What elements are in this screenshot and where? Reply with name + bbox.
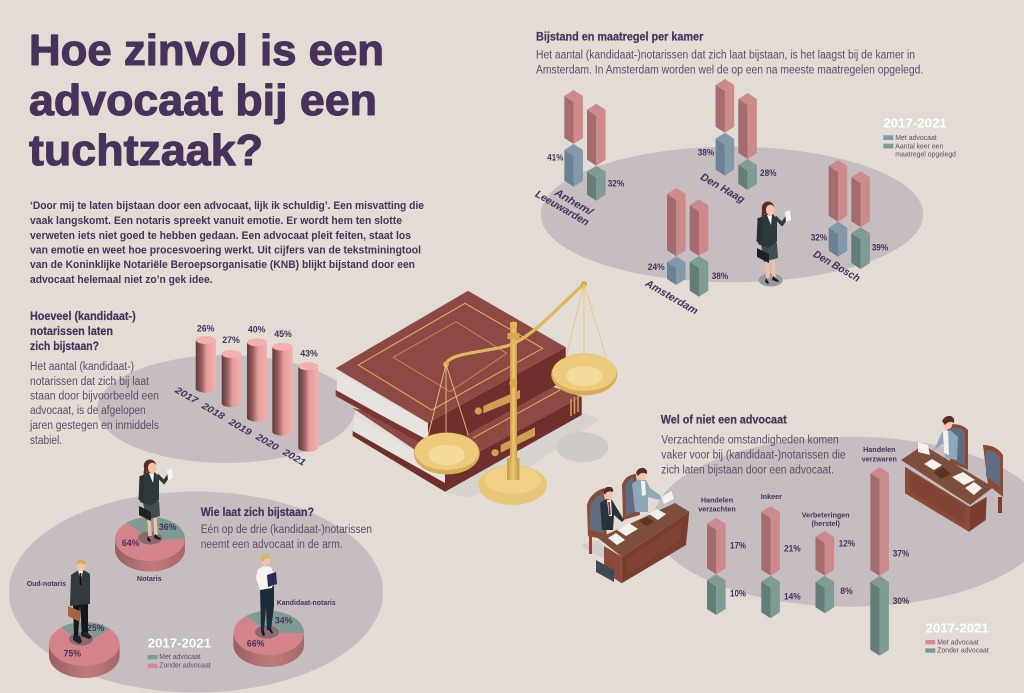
legend: wel of niet xyxy=(925,620,989,655)
text: wel of niet xyxy=(661,434,846,476)
cylinder chart: 2017-2021: 2021 xyxy=(280,446,307,469)
bar chart: Amsterdam: Amsterdam xyxy=(642,277,700,317)
bar chart: verbeteringen: 8% xyxy=(840,586,853,596)
text: wel of niet: vaker voor bij (kandidaat-)notarissen die xyxy=(661,449,846,461)
pie chart: oud-notaris: Oud-notaris xyxy=(27,579,66,588)
bar chart: handelen verzwaren: 37% xyxy=(893,548,909,558)
bar chart: handelen verzwaren: verzwaren xyxy=(862,455,897,464)
pie chart: notaris xyxy=(115,517,185,583)
bar chart: handelen verzwaren: 30% xyxy=(893,596,909,606)
bar chart: Arnhem/Leeuwarden: Anhem/ xyxy=(551,186,596,219)
cylinder chart: 2017-2021: 40% xyxy=(248,325,266,335)
heading: wie laat zich bijstaan: Wie laat zich bijstaan? xyxy=(201,507,314,519)
bar chart: handelen verzachten: verzachten xyxy=(698,505,736,514)
illustration: left desk with two people xyxy=(581,468,689,583)
text: wie laat zich bijstaan: Eén op de drie (kandidaat-)notarissen xyxy=(201,524,372,536)
legend: wel of niet: Met advocaat xyxy=(937,637,980,646)
pie chart: oud-notaris: 25% xyxy=(87,623,105,633)
pie chart: notaris: Notaris xyxy=(137,574,162,583)
panel: wie laat zich bijstaan xyxy=(9,460,383,692)
bar chart: Den Haag: 38% xyxy=(698,148,714,158)
intro text block: van emotie en weet hoe procesvoering werkt. Uit cijfers van de tekstminingtool xyxy=(30,244,421,256)
legend: bijstand per kamer: Met advocaat xyxy=(895,133,938,142)
figure: kandidaat-notaris woman xyxy=(256,554,277,636)
legend: bijstand per kamer: maatregel opgelegd xyxy=(895,150,956,159)
cylinder chart: 2017-2021: 2018 xyxy=(199,400,227,423)
pie chart: notaris: 64% xyxy=(122,538,140,548)
cylinder chart: 2017-2021: 43% xyxy=(300,349,318,359)
bar chart: handelen verzwaren xyxy=(862,445,909,656)
bar chart: Amsterdam xyxy=(642,188,728,317)
panel: wel of niet een advocaat xyxy=(581,414,1024,656)
bar chart: Amsterdam: 38% xyxy=(712,271,728,281)
text: hoeveel notarissen xyxy=(29,361,159,447)
pie chart: kandidaat-notaris: Kandidaat-notaris xyxy=(277,598,336,607)
pie chart: oud-notaris xyxy=(27,579,120,678)
bar chart: Arnhem/Leeuwarden xyxy=(533,90,624,229)
intro text block xyxy=(30,200,424,286)
pie chart: oud-notaris: 75% xyxy=(63,649,81,659)
scales xyxy=(414,281,617,505)
text: wie laat zich bijstaan xyxy=(201,524,372,551)
book: lower xyxy=(353,385,582,492)
heading: wel of niet: Wel of niet een advocaat xyxy=(661,414,787,426)
cylinder chart: 2017-2021 xyxy=(172,324,318,469)
bar chart: Den Haag xyxy=(698,79,777,206)
legend: wel of niet: Zonder advocaat xyxy=(937,646,989,655)
figure: oud-notaris man xyxy=(68,560,92,644)
legend: wie laat zich bijstaan: Zonder advocaat xyxy=(159,660,211,669)
bar chart: Den Bosch: Den Bosch xyxy=(811,248,862,285)
cylinder chart: 2017-2021: 45% xyxy=(274,329,292,339)
intro text block: ‘Door mij te laten bijstaan door een advocaat, lijk ik schuldig’. Een misvatting die xyxy=(30,200,424,212)
bar chart: inkeer: 14% xyxy=(784,592,801,602)
bar chart: handelen verzwaren: Handelen xyxy=(863,445,895,454)
intro text block: van de Koninklijke Notariële Beroepsorganisatie (KNB) blijkt bijstand door een xyxy=(30,259,415,271)
text: hoeveel notarissen: Het aantal (kandidaat-) xyxy=(30,361,134,373)
cylinder chart: 2017-2021: 26% xyxy=(197,324,215,334)
text: hoeveel notarissen: notarissen dat zich bij laat xyxy=(30,376,150,388)
bar chart: verbeteringen xyxy=(802,510,855,613)
text: bijstand per kamer xyxy=(536,49,923,76)
bar chart: Den Haag: 28% xyxy=(760,168,777,178)
text: hoeveel notarissen: staan door bijvoorbeeld een xyxy=(30,390,159,402)
panel: hoeveel notarissen laten zich bijstaan xyxy=(29,311,355,469)
figure: notaris woman xyxy=(139,460,173,542)
bar chart: inkeer: 21% xyxy=(784,544,801,554)
cylinder chart: 2017-2021: 2019 xyxy=(226,416,254,439)
bar chart: handelen verzachten: Handelen xyxy=(701,495,733,504)
bar chart: handelen verzachten xyxy=(698,495,746,615)
pie chart: kandidaat-notaris: 34% xyxy=(275,615,293,625)
bar chart: Den Haag: Den Haag xyxy=(698,171,747,206)
figure: woman with paper xyxy=(757,202,791,286)
bar chart: verbeteringen: Verbeteringen xyxy=(802,510,850,519)
bar chart: Arnhem/Leeuwarden: Leeuwarden xyxy=(533,188,591,229)
cylinder chart: 2017-2021: 2017 xyxy=(172,384,200,407)
heading: hoeveel notarissen: zich bijstaan? xyxy=(30,341,99,353)
text: wie laat zich bijstaan: neemt een advocaat in de arm. xyxy=(201,539,343,551)
illustration: right desk with one person xyxy=(901,416,1003,532)
bar chart: handelen verzachten: 17% xyxy=(730,541,746,551)
intro text block: advocaat helemaal niet zo’n gek idee. xyxy=(30,274,212,286)
intro text block: vaak langskomt. Een notaris spreekt vanuit emotie. Er wordt hem ten slotte xyxy=(30,215,402,227)
book: upper xyxy=(336,291,566,456)
text: wel of niet: Verzachtende omstandigheden komen xyxy=(661,434,839,446)
legend: bijstand per kamer: Aantal keer een xyxy=(895,141,943,150)
bar chart: verbeteringen: 12% xyxy=(839,538,855,548)
legend: wie laat zich bijstaan xyxy=(148,635,211,669)
legend: wel of niet: 2017-2021 xyxy=(926,620,989,635)
bar chart: Arnhem/Leeuwarden: 41% xyxy=(547,152,563,162)
heading: hoeveel notarissen: notarissen laten xyxy=(30,326,113,338)
cylinder chart: 2017-2021: 2020 xyxy=(253,431,281,454)
heading: bijstand per kamer: Bijstand en maatregel per kamer xyxy=(536,32,704,44)
legend: wie laat zich bijstaan: Met advocaat xyxy=(159,652,202,661)
bar chart: inkeer xyxy=(761,492,801,618)
legend: wie laat zich bijstaan: 2017-2021 xyxy=(148,635,211,650)
title: advocaat bij een xyxy=(29,76,377,125)
intro text block: verweten iets niet goed te hebben gedaan. Een advocaat pleit feiten, staat los xyxy=(30,230,411,242)
pie chart: kandidaat-notaris xyxy=(233,598,336,667)
text: hoeveel notarissen: jaren gestegen en inmiddels xyxy=(29,420,159,432)
text: bijstand per kamer: Het aantal (kandidaat-)notarissen dat zich laat bijstaan, is het laagst bij de kamer in xyxy=(536,49,915,61)
bar chart: Arnhem/Leeuwarden: 32% xyxy=(608,179,624,189)
pie chart: notaris: 36% xyxy=(159,522,177,532)
bar chart: Den Bosch: 32% xyxy=(811,233,827,243)
legend: bijstand per kamer: 2017-2021 xyxy=(883,115,947,130)
panel: bijstand en maatregel per kamer xyxy=(533,32,956,317)
text: hoeveel notarissen: advocaat, is de afgelopen xyxy=(30,405,146,417)
text: bijstand per kamer: Amsterdam. In Amsterdam worden wel de op een na meeste maatregelen opgelegd. xyxy=(536,64,923,76)
bar chart: inkeer: Inkeer xyxy=(761,492,782,501)
title xyxy=(29,26,384,175)
bar chart: verbeteringen: (herstel) xyxy=(812,519,840,528)
bar chart: Den Bosch xyxy=(811,160,888,285)
heading: hoeveel notarissen: Hoeveel (kandidaat-) xyxy=(30,311,136,323)
bar chart: handelen verzachten: 10% xyxy=(730,588,746,598)
text: hoeveel notarissen: stabiel. xyxy=(30,435,62,447)
title: tuchtzaak? xyxy=(29,126,263,175)
text: wel of niet: zich laten bijstaan door een advocaat. xyxy=(661,464,834,476)
bar chart: Amsterdam: 24% xyxy=(648,262,665,272)
bar chart: Den Bosch: 39% xyxy=(872,243,888,253)
pie chart: kandidaat-notaris: 66% xyxy=(247,639,265,649)
title: Hoe zinvol is een xyxy=(29,26,384,75)
heading: hoeveel notarissen xyxy=(30,311,136,353)
cylinder chart: 2017-2021: 27% xyxy=(222,335,240,345)
illustration: books and scales xyxy=(336,281,617,505)
legend: bijstand per kamer xyxy=(883,115,956,159)
